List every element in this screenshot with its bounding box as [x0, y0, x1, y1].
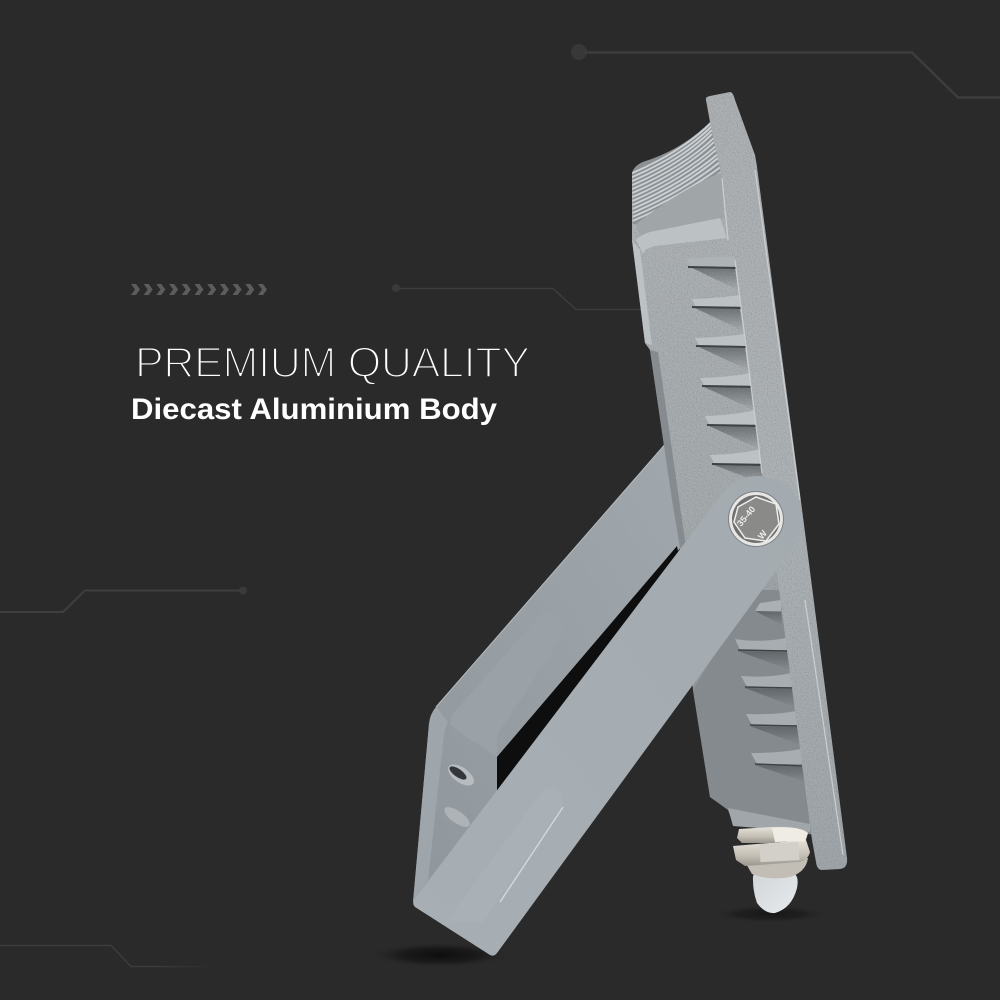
housing: recess under ribs [636, 172, 724, 238]
pivot bolt: W [756, 528, 769, 541]
subtitle: Diecast Aluminium Body [131, 393, 497, 426]
housing body [630, 120, 815, 835]
floor shadow: cable gland [710, 905, 830, 923]
bracket: front arm [413, 476, 801, 956]
housing: rear edge [650, 350, 686, 548]
circuit line: bottom left [0, 946, 218, 967]
front arm: channel highlight [500, 807, 563, 902]
bracket: mounting holes [441, 760, 478, 831]
cooling fins: upper [687, 256, 764, 484]
front arm: pressed channel [447, 788, 563, 922]
gland: lower nut [733, 840, 810, 866]
pivot bolt [728, 491, 784, 547]
housing: light ledge [636, 218, 727, 254]
housing: neck [728, 808, 810, 832]
cable gland [733, 827, 810, 913]
gland: upper nut [737, 827, 808, 843]
floodlight product [413, 92, 847, 956]
circuit line: middle [392, 284, 642, 310]
circuit line: left [0, 586, 247, 612]
front plate: edge highlights [722, 170, 843, 855]
gland: dome [745, 858, 808, 878]
circuit line: top right [571, 44, 1000, 98]
housing: ribbed top [632, 122, 721, 224]
bolt: stamped marks: 35-40 [735, 504, 757, 528]
bolt: hex head [734, 497, 779, 541]
gland: knurled face [760, 842, 799, 862]
bracket: window gap [497, 546, 679, 795]
title: PREMIUM QUALITY [135, 339, 530, 387]
cooling fins: lower [735, 600, 805, 782]
front plate [706, 92, 847, 870]
gland: rubber cap [753, 870, 798, 913]
bracket: rear arm [413, 442, 682, 902]
floor shadow: bracket [368, 942, 512, 968]
chevron row [131, 284, 267, 295]
housing: darker lower section [693, 590, 812, 830]
